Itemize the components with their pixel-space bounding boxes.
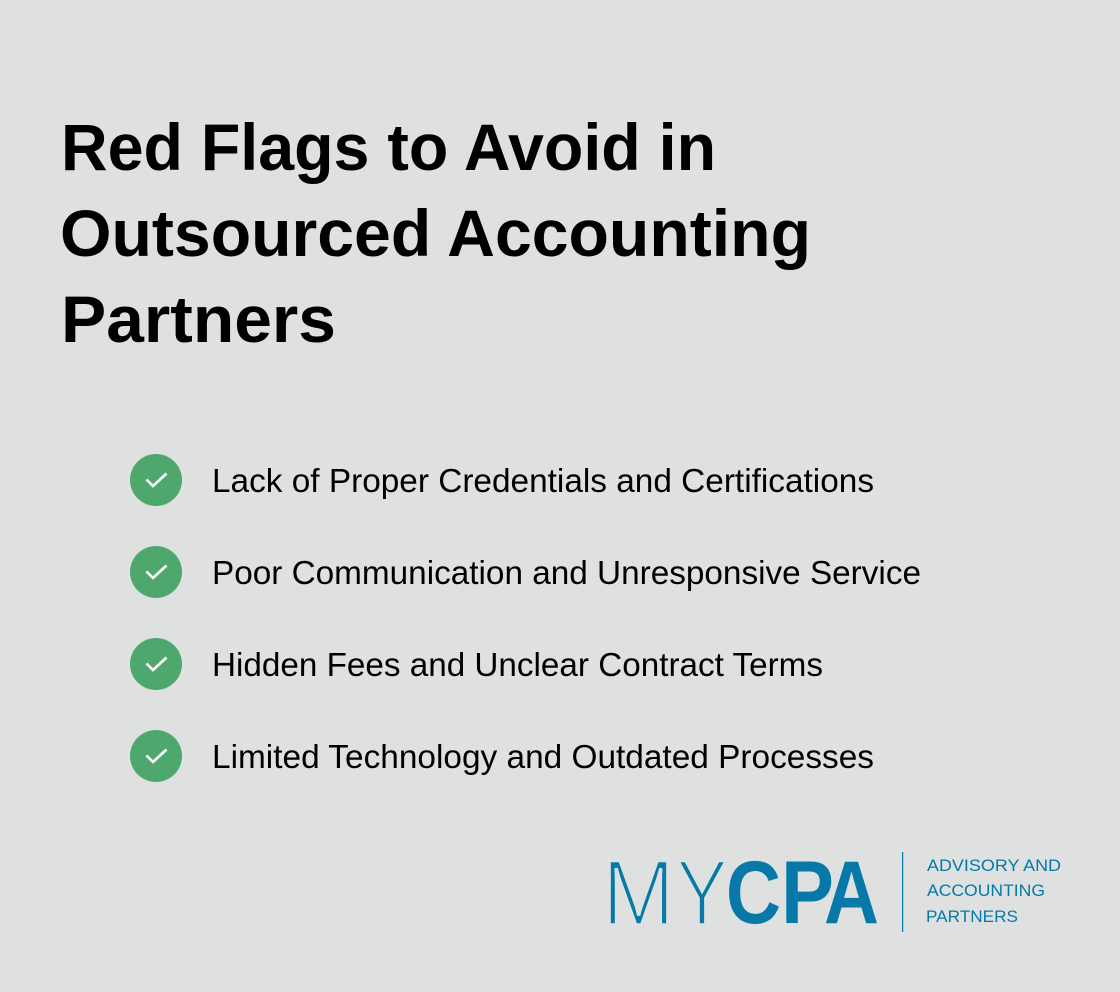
logo wordmark: CPA: C xyxy=(726,842,781,942)
title: Outsourced Accounting xyxy=(60,196,811,270)
logo tagline: ACCOUNTING xyxy=(927,881,1045,900)
list item: communication xyxy=(130,546,921,598)
list item: technology: Limited Technology and Outdated Processes xyxy=(212,738,874,775)
title xyxy=(60,110,811,356)
logo divider xyxy=(902,852,903,932)
logo wordmark: CPA xyxy=(726,842,879,942)
logo tagline: PARTNERS xyxy=(926,907,1018,926)
list item: fees: Hidden Fees and Unclear Contract Terms xyxy=(212,646,823,683)
logo tagline: ADVISORY AND xyxy=(927,856,1061,875)
logo xyxy=(602,840,1061,945)
list item: credentials: Lack of Proper Credentials and Certifications xyxy=(212,462,874,499)
title: Red Flags to Avoid in xyxy=(61,110,716,184)
logo wordmark: MY xyxy=(602,840,728,945)
logo wordmark: MY: Y xyxy=(676,840,728,945)
list item: communication: Poor Communication and Unresponsive Service xyxy=(212,554,921,591)
list item: technology xyxy=(130,730,874,782)
logo wordmark: CPA: A xyxy=(824,842,879,942)
list item: credentials xyxy=(130,454,874,506)
list item: fees xyxy=(130,638,823,690)
checklist xyxy=(130,454,921,782)
title: Partners xyxy=(61,282,336,356)
logo tagline xyxy=(926,856,1061,926)
logo wordmark: CPA: P xyxy=(781,842,834,942)
logo wordmark: MY: M xyxy=(602,840,675,945)
